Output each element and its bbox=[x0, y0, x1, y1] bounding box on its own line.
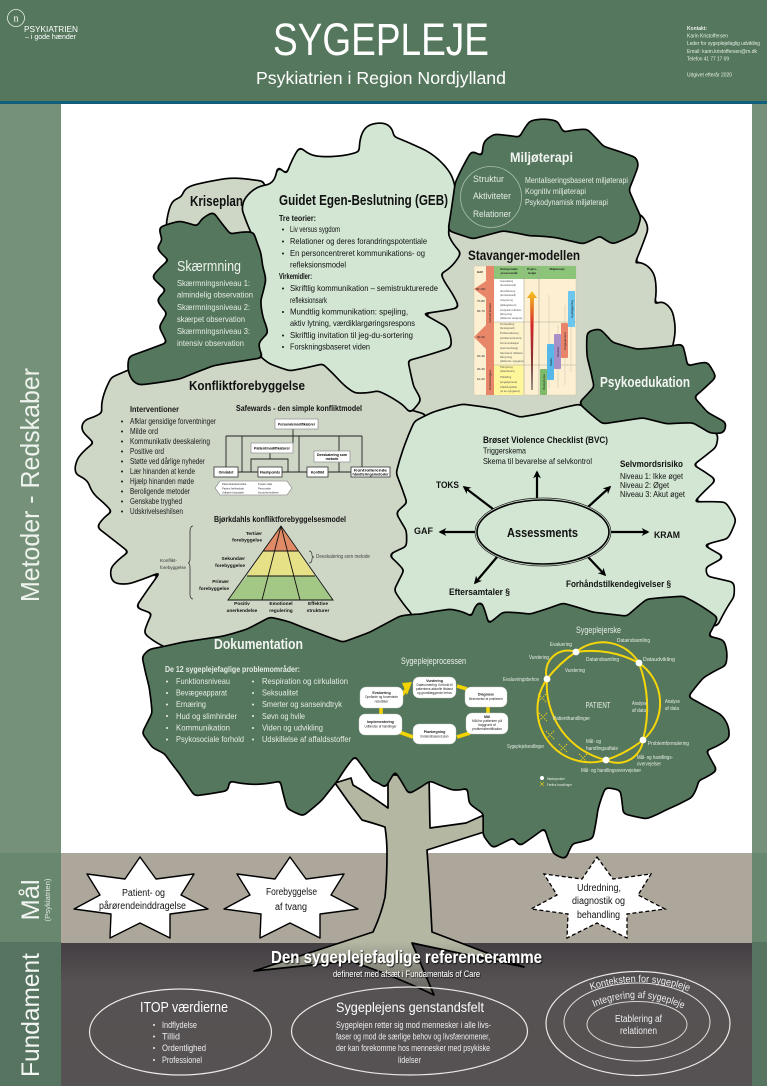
contact block: Email: karin.kristoffersen@rn.dk bbox=[687, 49, 757, 55]
chart: Stavanger model: Tilknytning bbox=[500, 365, 513, 369]
diagram: Safewards: Patientkarakteristika bbox=[222, 482, 247, 486]
diagram: Sygeplejeprocessen: Beskrivelse af problemer bbox=[469, 697, 504, 701]
labels: Eftersamtaler § bbox=[449, 587, 510, 597]
diagram: Sygeplejeprocessen: patientens aktuelle tilstand bbox=[416, 687, 453, 691]
diagram: Sygeplejerske patient cycle: Evalueringsbehov bbox=[503, 677, 539, 683]
chart: Stavanger model: Identifisering bbox=[500, 289, 516, 293]
text list: Kognitiv miljøterapi bbox=[525, 187, 586, 196]
legend bbox=[540, 776, 573, 787]
pyramid chart: forebyggelse bbox=[160, 565, 186, 571]
diagram: Sygeplejeprocessen: Opnåede og forventede bbox=[365, 695, 398, 699]
labels: Selvmordsrisiko bbox=[620, 459, 683, 469]
chart: Stavanger model: 20-30 bbox=[477, 354, 485, 358]
list: problemområder: Kommunikation bbox=[176, 722, 230, 732]
diagram: Sygeplejeprocessen: Evaluering bbox=[372, 691, 391, 695]
diagram: Sygeplejerske patient cycle: Vurdering bbox=[565, 668, 585, 674]
diagram: Safewards: Området bbox=[219, 470, 234, 474]
text block: refleksionsark bbox=[290, 295, 328, 305]
star: Patient- og pårørendeinddragelse bbox=[74, 857, 208, 938]
left strip: Metoder - Redskaber: Metoder - Redskaber bbox=[15, 368, 45, 602]
chart: Stavanger model: Psyko- bbox=[527, 267, 537, 271]
left strip: Mål: (Psykiatrien) bbox=[43, 878, 52, 922]
contact block: Udgivet efterår 2020 bbox=[687, 72, 732, 78]
diagram: Sygeplejeprocessen: og grundlæggende behov bbox=[417, 691, 452, 695]
diagram: Safewards: Personaler bbox=[258, 486, 271, 490]
header bbox=[0, 0, 767, 104]
chart: Stavanger model: GAF bbox=[477, 270, 483, 274]
chart: Stavanger model: tilknytning bbox=[500, 355, 512, 359]
panel: Psykoedukation: Psykoedukation bbox=[600, 375, 690, 391]
panel: Assessments bbox=[390, 405, 735, 625]
labels: Brøset Violence Checklist (BVC) bbox=[483, 435, 608, 445]
chart: Stavanger model: Struktur bbox=[556, 347, 560, 357]
text block: Skriftlig invitation til jeg-du-sortering bbox=[290, 330, 413, 340]
oval: ITOP værdierne: Tillid bbox=[162, 1032, 180, 1042]
labels: TOKS bbox=[436, 480, 459, 490]
chart: Stavanger model: prosessmål bbox=[501, 271, 517, 275]
list: Interventioner: Interventioner bbox=[130, 404, 180, 414]
list: Interventioner: Støtte ved dårlige nyheder bbox=[130, 456, 205, 466]
diagram: Safewards: Patientmodifikatorer bbox=[254, 446, 291, 450]
chart: Stavanger model: (sammenheng) bbox=[500, 346, 518, 350]
text block: Forskningsbaseret viden bbox=[290, 342, 370, 352]
nested ovals: Fundamentals of Care: Integrering af sygepleje bbox=[592, 991, 684, 1008]
star: Forebyggelse af tvang: af tvang bbox=[275, 902, 307, 913]
list: Interventioner: Positive ord bbox=[130, 446, 164, 456]
diagram: Sygeplejerske patient cycle: Vurdering bbox=[529, 655, 549, 661]
panel: Kriseplan bbox=[167, 179, 280, 250]
list: Interventioner: Lær hinanden at kende bbox=[130, 466, 195, 476]
chart: Stavanger model: 60-70 bbox=[477, 309, 485, 313]
panel: Guidet Egen-Beslutning bbox=[243, 120, 640, 412]
list: problemområder: Viden og udvikling bbox=[262, 722, 323, 732]
pyramid chart: strukturer bbox=[307, 608, 329, 614]
oval: ITOP værdierne: Professionel bbox=[162, 1055, 202, 1065]
diagram: Sygeplejerske patient cycle bbox=[503, 625, 689, 787]
diagram: Sygeplejeprocessen: problemidentifikation bbox=[472, 727, 502, 731]
legend: Mødepunkter bbox=[547, 777, 566, 781]
chart: Stavanger model: Miljøterapi bbox=[549, 267, 565, 271]
labels bbox=[414, 435, 686, 597]
oval: Sygeplejens genstandsfelt: lidelser bbox=[398, 1055, 421, 1065]
pyramid chart: Sekundær bbox=[222, 556, 245, 562]
list: problemområder: Funktionsniveau bbox=[176, 676, 230, 686]
diagram: Safewards: Personalemodifikatorer bbox=[278, 422, 316, 426]
heading: Skærmning bbox=[177, 258, 241, 275]
title: SYGEPLEJE bbox=[273, 14, 489, 65]
labels: KRAM bbox=[654, 530, 680, 540]
star: Udredning, diagnostik og behandling: behandling bbox=[577, 910, 620, 921]
diagram: Safewards: metode bbox=[326, 457, 338, 461]
text block: En personcentreret kommunikations- og bbox=[290, 248, 425, 258]
labels: Niveau 2: Øget bbox=[620, 480, 670, 490]
legend: Fælles handlinger bbox=[547, 783, 573, 787]
chart: Stavanger model: (diskursiv analyse) bbox=[500, 316, 522, 320]
circle: Struktur, Aktiviteter, Relationer: Struktur bbox=[473, 174, 504, 184]
chart: Stavanger model: (problemorientert) bbox=[500, 336, 521, 340]
diagram: Sygeplejeprocessen: Datavurdering i forhold til bbox=[416, 683, 453, 687]
text list: Mentaliseringsbaseret miljøterapi bbox=[525, 176, 628, 185]
list: problemområder: Udskillelse af affaldsstoffer bbox=[262, 734, 351, 744]
text block: Virkemidler: bbox=[279, 271, 312, 281]
left strip: Fundament bbox=[0, 942, 61, 1086]
chart: Stavanger model bbox=[474, 266, 576, 395]
list: Interventioner bbox=[122, 404, 216, 516]
text block: Skærmningsniveau 3: bbox=[177, 326, 250, 336]
chart: Stavanger model: 10-20 bbox=[477, 377, 485, 381]
text block: aktiv lytning, værdiklargøringsrespons bbox=[290, 318, 415, 328]
oval: Sygeplejens genstandsfelt bbox=[292, 987, 528, 1075]
text block: Relationer og deres forandringspotentiale bbox=[290, 236, 427, 246]
diagram: Sygeplejeprocessen: Diagnose bbox=[478, 692, 494, 696]
chart: Stavanger model: Innhold begges bbox=[488, 369, 492, 390]
diagram: Sygeplejerske patient cycle: Dataindsamling bbox=[617, 638, 650, 644]
diagram: Sygeplejeprocessen: Implementering bbox=[367, 720, 394, 724]
contact block: Karin Kristoffersen bbox=[687, 34, 728, 40]
center ellipse bbox=[475, 498, 611, 566]
contact block bbox=[687, 26, 760, 78]
left strip: Mål bbox=[0, 853, 61, 942]
nested ovals: Fundamentals of Care: Konteksten for sygepleje bbox=[590, 974, 690, 991]
pyramid chart bbox=[160, 526, 370, 614]
heading: Miljøterapi: Miljøterapi bbox=[510, 149, 573, 165]
diagram: Safewards: Kontorforholdene bbox=[258, 490, 279, 494]
diagram: Sygeplejerske patient cycle: Analyse bbox=[632, 701, 647, 707]
diagram: Sygeplejerske patient cycle: af data bbox=[632, 708, 647, 714]
pyramid chart: Emotionel bbox=[269, 601, 293, 607]
oval: ITOP værdierne bbox=[90, 989, 272, 1075]
chart: Stavanger model: Beskyttelse bbox=[542, 374, 546, 390]
logo: n bbox=[14, 14, 18, 24]
star: Patient- og pårørendeinddragelse: pårørendeinddragelse bbox=[99, 900, 186, 912]
list: Interventioner: Beroligende metoder bbox=[130, 486, 190, 496]
labels: Forhåndstilkendegivelser § bbox=[566, 579, 671, 589]
right strip bbox=[752, 104, 767, 1086]
chart: Stavanger model: (engasjement) bbox=[500, 380, 517, 384]
text block: almindelig observation bbox=[177, 290, 253, 300]
diagram: Sygeplejerske patient cycle: PATIENT bbox=[586, 701, 611, 710]
panel: Kriseplan: Kriseplan bbox=[190, 194, 243, 210]
heading: Konfliktforebyggelse bbox=[189, 378, 305, 393]
oval: Sygeplejens genstandsfelt: Sygeplejen retter sig mod mennesker i alle livs- bbox=[336, 1020, 491, 1030]
arrows bbox=[440, 472, 648, 583]
chart: Stavanger model: 70-80 bbox=[477, 299, 485, 303]
text list: Psykodynamisk miljøterapi bbox=[525, 198, 608, 207]
heading: Dokumentation bbox=[214, 637, 303, 653]
pyramid chart: Positiv bbox=[234, 601, 250, 607]
band: Fundament background bbox=[61, 943, 752, 1086]
diagram: Sygeplejerske patient cycle: Sygeplejerske bbox=[576, 625, 621, 635]
panel: Miljøterapi bbox=[449, 120, 640, 243]
text block: skærpet observation bbox=[177, 314, 245, 324]
chart: Stavanger model: 20-30 bbox=[477, 367, 485, 371]
text block bbox=[177, 278, 253, 348]
subtitle: Psykiatrien i Region Nordjylland bbox=[256, 68, 506, 88]
text list bbox=[525, 176, 628, 207]
chart: Stavanger model: Samstemt refleksiv bbox=[500, 351, 523, 355]
labels: GAF bbox=[414, 526, 434, 536]
pyramid chart: regulering bbox=[269, 608, 293, 614]
diagram: Sygeplejeprocessen: Evidensbaseret plan bbox=[420, 734, 449, 738]
text block bbox=[279, 213, 438, 352]
text block: Mundtlig kommunikation: spejling, bbox=[290, 306, 408, 316]
oval: Sygeplejens genstandsfelt: der kan forekomme hos mennesker med psykiske bbox=[336, 1043, 490, 1053]
center ellipse: Assessments bbox=[507, 525, 578, 540]
list: problemområder: Smerter og sanseindtryk bbox=[262, 699, 343, 709]
panel: Skærmning bbox=[129, 213, 267, 384]
heading: Den sygeplejefaglige referenceramme: defineret med afsæt i Fundamentals of Care bbox=[333, 969, 480, 979]
heading: Den sygeplejefaglige referenceramme: Den sygeplejefaglige referenceramme bbox=[271, 947, 542, 967]
diagram: Sygeplejerske patient cycle: handlingsaftale bbox=[586, 746, 618, 752]
chart: Stavanger model: (kontekstuell) bbox=[500, 293, 516, 297]
text block: Skærmningsniveau 1: bbox=[177, 278, 250, 288]
diagram: Sygeplejerske patient cycle: overvejelser bbox=[637, 762, 661, 768]
star: Patient- og pårørendeinddragelse: Patient- og bbox=[122, 888, 165, 899]
diagram: Sygeplejerske patient cycle: Problemformulering bbox=[648, 741, 689, 747]
chart: Stavanger model: Problemløsning bbox=[500, 331, 519, 335]
diagram: Sygeplejeprocessen: Sygeplejeprocessen bbox=[401, 656, 466, 666]
chart: Stavanger model: (diskursiv, oppgave) bbox=[500, 359, 524, 363]
diagram: Safewards: Deeskalering som bbox=[317, 453, 347, 457]
panel: Konfliktforebyggelse bbox=[76, 340, 425, 660]
list: Interventioner: Milde ord bbox=[130, 426, 158, 436]
pyramid chart: Tertiær bbox=[246, 531, 262, 537]
list: Interventioner: Kommunikativ deeskalering bbox=[130, 436, 210, 446]
diagram: Safewards: håndteringsmetoder bbox=[352, 472, 389, 476]
logo: – i gode hænder bbox=[25, 32, 76, 41]
nested ovals: Fundamentals of Care bbox=[545, 970, 731, 1076]
chart: Stavanger model: Tilkobling bbox=[500, 375, 512, 379]
diagram: Safewards: Udkørte hospitalet bbox=[222, 490, 244, 494]
list: problemområder: Søvn og hvile bbox=[262, 711, 305, 721]
pyramid chart: forebyggelse bbox=[199, 586, 229, 592]
panel: Stavanger-modellen: Stavanger-modellen bbox=[468, 248, 580, 263]
list: Interventioner: Afklar gensidige forventninger bbox=[130, 416, 216, 426]
chart: Stavanger model: (kontekstuell) bbox=[500, 283, 516, 287]
nested ovals: Fundamentals of Care: Etablering af bbox=[615, 1014, 662, 1025]
chart: Stavanger model: 80-100 bbox=[476, 287, 486, 291]
chart: Stavanger model: 30-40 bbox=[477, 335, 485, 339]
chart: Stavanger model: terapi bbox=[528, 271, 536, 275]
chart: Stavanger model: Analytisk refleksiv bbox=[500, 308, 522, 312]
star: Udredning, diagnostik og behandling: diagnostik og bbox=[572, 896, 625, 907]
pyramid chart: Deeskalering som metode bbox=[316, 554, 370, 560]
oval: Sygeplejens genstandsfelt: Sygeplejens genstandsfelt bbox=[336, 999, 484, 1015]
contact block: Kontakt: bbox=[687, 26, 707, 32]
diagram: Sygeplejerske patient cycle: Mål- og handlings- bbox=[637, 754, 673, 761]
list: problemområder: Respiration og cirkulation bbox=[262, 676, 348, 686]
text block: Tre teorier: bbox=[279, 213, 316, 223]
heading: Den sygeplejefaglige referenceramme bbox=[271, 947, 542, 979]
labels: Skema til bevarelse af selvkontrol bbox=[483, 456, 592, 466]
text block: Liv versus sygdom bbox=[290, 224, 340, 234]
star: Udredning, diagnostik og behandling: Udredning, bbox=[577, 883, 621, 894]
chart: Stavanger model: (atferdsnær) bbox=[500, 369, 515, 373]
chart: Stavanger model: tilknytning bbox=[500, 312, 512, 316]
diagram: Sygeplejeprocessen: Vurdering bbox=[426, 679, 443, 683]
text block: Skærmningsniveau 2: bbox=[177, 302, 250, 312]
diagram: Sygeplejerske patient cycle: Analyse bbox=[665, 699, 680, 705]
heading: Bjørkdahl: Bjørkdahls konfliktforebyggelsesmodel bbox=[214, 514, 346, 524]
tree trunk and roots bbox=[254, 775, 524, 995]
list: problemområder: Hud og slimhinder bbox=[176, 711, 237, 721]
diagram: Sygeplejeprocessen: Mål for patienten på bbox=[472, 719, 502, 723]
labels: Niveau 3: Akut øget bbox=[620, 489, 686, 499]
contact block: Telefon 41 77 17 09 bbox=[687, 56, 729, 62]
diagram: Safewards: Fysisk miljø bbox=[258, 482, 272, 486]
heading: Guidet Egen-Beslutning: Guidet Egen-Beslutning (GEB) bbox=[279, 192, 448, 209]
list: problemområder: De 12 sygeplejefaglige problemområder: bbox=[165, 664, 300, 674]
labels: Niveau 1: Ikke øget bbox=[620, 471, 684, 481]
text block: intensiv observation bbox=[177, 338, 244, 348]
text block: refleksionsmodel bbox=[290, 260, 346, 270]
pyramid chart: anerkendelse bbox=[227, 608, 258, 614]
oval: ITOP værdierne: Ordentlighed bbox=[162, 1043, 206, 1053]
list: problemområder: Psykosociale forhold bbox=[176, 734, 244, 744]
circle: Struktur, Aktiviteter, Relationer: Aktiviteter bbox=[473, 191, 511, 201]
logo bbox=[8, 10, 78, 41]
panel: Psykoedukation bbox=[580, 330, 725, 432]
pyramid chart: forebyggelse bbox=[232, 538, 262, 544]
diagram: Sygeplejeprocessen bbox=[359, 656, 508, 744]
chart: Stavanger model: Relasjonelle bbox=[500, 267, 518, 271]
star: Udredning, diagnostik og behandling bbox=[531, 857, 665, 938]
chart: Stavanger model: (funksjonell) bbox=[500, 326, 515, 330]
logo: PSYKIATRIEN bbox=[24, 24, 78, 34]
list: problemområder: Seksualitet bbox=[262, 688, 299, 698]
diagram: Sygeplejeprocessen: resultater bbox=[375, 700, 389, 704]
diagram: Sygeplejerske patient cycle: Mål- og bbox=[586, 738, 601, 745]
list: Interventioner: Udskrivelseshilsen bbox=[130, 506, 183, 516]
pyramid chart: Konflikt- bbox=[160, 558, 177, 564]
list: problemområder bbox=[165, 664, 351, 744]
chart: Stavanger model: (dialogbasert) bbox=[500, 303, 517, 307]
chart: Stavanger model: Kommunikasjon bbox=[500, 341, 520, 345]
diagram: Sygeplejerske patient cycle: Sygeplejehandlinger bbox=[507, 744, 544, 750]
left strip: Mål: Mål bbox=[17, 880, 45, 920]
chart: Stavanger model: Utkobling/flukt bbox=[500, 385, 517, 389]
left strip: Fundament: Fundament bbox=[17, 953, 45, 1077]
chart: Stavanger model: Engasjement bbox=[563, 332, 567, 350]
list: Interventioner: Genskabe tryghed bbox=[130, 496, 182, 506]
panel: Stavanger-modellen bbox=[400, 215, 674, 428]
diagram: Sygeplejerske patient cycle: Evaluering bbox=[550, 642, 572, 648]
diagram: Safewards: Flashpoints bbox=[260, 470, 280, 474]
star: Forebyggelse af tvang bbox=[224, 857, 358, 938]
nested ovals: Fundamentals of Care: relationen bbox=[620, 1026, 657, 1037]
diagram: Safewards bbox=[214, 419, 390, 495]
oval: ITOP værdierne: Indflydelse bbox=[162, 1020, 197, 1030]
pyramid chart: forebyggelse bbox=[215, 563, 245, 569]
oval: Sygeplejens genstandsfelt: faser og mod de særlige behov og livsfænomener, bbox=[336, 1032, 490, 1042]
diagram: Sygeplejerske patient cycle: Mål- og handlingsovervejelser bbox=[581, 767, 641, 774]
circle: Struktur, Aktiviteter, Relationer: Relationer bbox=[473, 209, 511, 219]
left strip: Metoder - Redskaber bbox=[0, 104, 61, 853]
star: Forebyggelse af tvang: Forebyggelse bbox=[266, 887, 317, 898]
panel: Dokumentation canopy bbox=[143, 597, 728, 858]
chart: Stavanger model: (ut av oppgaven) bbox=[500, 389, 520, 393]
diagram: Sygeplejerske patient cycle: Dataindsamling bbox=[586, 657, 619, 663]
diagram: Sygeplejeprocessen: Planlægning bbox=[424, 730, 445, 734]
circle: Struktur, Aktiviteter, Relationer bbox=[460, 166, 522, 228]
oval: ITOP værdierne: ITOP værdierne bbox=[140, 999, 228, 1016]
list: problemområder: Bevægeapparat bbox=[176, 688, 228, 698]
text block: Skriftlig kommunikation – semistrukturerede bbox=[290, 283, 438, 293]
diagram: Sygeplejerske patient cycle: Dataudvikling bbox=[643, 657, 675, 663]
diagram: Sygeplejeprocessen: baggrund af bbox=[478, 723, 496, 727]
diagram: Sygeplejerske patient cycle: af data bbox=[665, 706, 680, 712]
diagram: Safewards: Konflikt bbox=[311, 470, 325, 474]
chart: Stavanger model: Ivaretaking bbox=[500, 279, 514, 283]
chart: Stavanger model: Støtte bbox=[549, 358, 553, 366]
diagram: Sygeplejeprocessen: Mål bbox=[484, 715, 490, 719]
pyramid chart: Effektive bbox=[308, 601, 328, 607]
heading: Safewards: Safewards - den simple konfliktmodel bbox=[236, 403, 362, 413]
diagram: Sygeplejerske patient cycle: Patienthandlinger bbox=[553, 716, 590, 722]
labels: Triggerskema bbox=[483, 446, 526, 456]
chart: Stavanger model: Forhandling bbox=[500, 322, 515, 326]
band: Mål background bbox=[61, 853, 752, 943]
chart: Stavanger model: Gyldiggjøring bbox=[570, 300, 574, 318]
diagram: Sygeplejeprocessen: Udførelse af handlinger bbox=[364, 724, 397, 728]
diagram: Safewards: Kontrollerende bbox=[354, 468, 387, 472]
list: Interventioner: Hjælp hinanden møde bbox=[130, 476, 194, 486]
diagram: Safewards: Patient fællesskab bbox=[222, 486, 244, 490]
list: problemområder: Ernæring bbox=[176, 699, 206, 709]
chart: Stavanger model: Innhold bredes bbox=[488, 303, 492, 323]
pyramid chart: Primær bbox=[212, 579, 229, 585]
contact block: Leder for sygeplejefaglig udvikling bbox=[687, 41, 760, 47]
chart: Stavanger model: Integrering bbox=[500, 298, 513, 302]
